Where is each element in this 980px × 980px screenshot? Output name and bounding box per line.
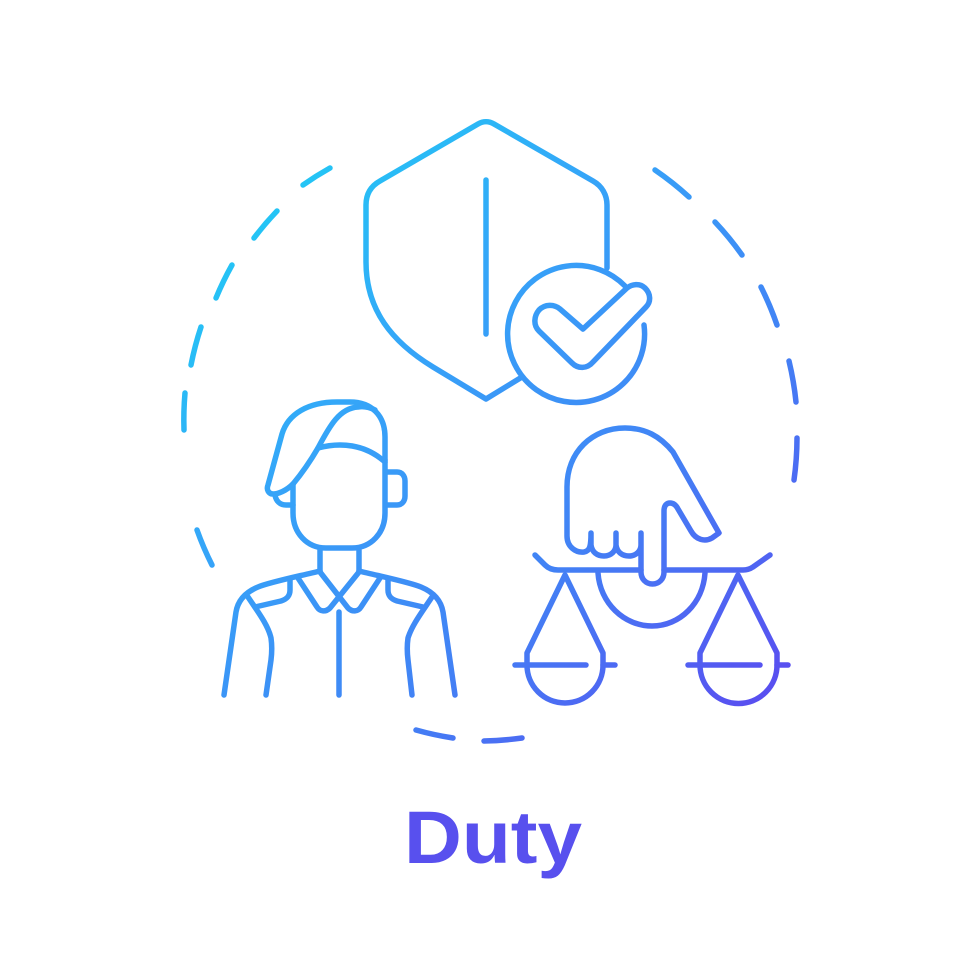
left ear <box>275 495 293 505</box>
icon: man in uniform <box>224 402 455 695</box>
dashed circle ring <box>184 168 797 741</box>
sleeves <box>248 597 272 695</box>
neck <box>320 550 359 571</box>
epaulettes <box>255 580 290 607</box>
icon: shield with check badge <box>366 122 650 402</box>
shield centre line <box>483 180 489 334</box>
title: Duty <box>404 796 582 879</box>
right pan line <box>688 662 788 668</box>
right pan <box>700 575 777 704</box>
hair <box>267 402 385 494</box>
face <box>293 460 385 548</box>
collar <box>298 572 359 611</box>
shirt placket <box>336 612 342 695</box>
icon: hand pressing scales <box>515 428 788 704</box>
right ear <box>387 472 405 505</box>
hand <box>567 428 719 584</box>
left pan line <box>515 662 615 668</box>
scale beam <box>535 555 770 570</box>
shield outline <box>366 122 607 399</box>
check mark <box>535 285 650 367</box>
left pan <box>527 575 603 703</box>
check badge circle <box>508 265 645 402</box>
scale base half circle <box>598 573 705 626</box>
shoulders and arms <box>224 571 320 695</box>
